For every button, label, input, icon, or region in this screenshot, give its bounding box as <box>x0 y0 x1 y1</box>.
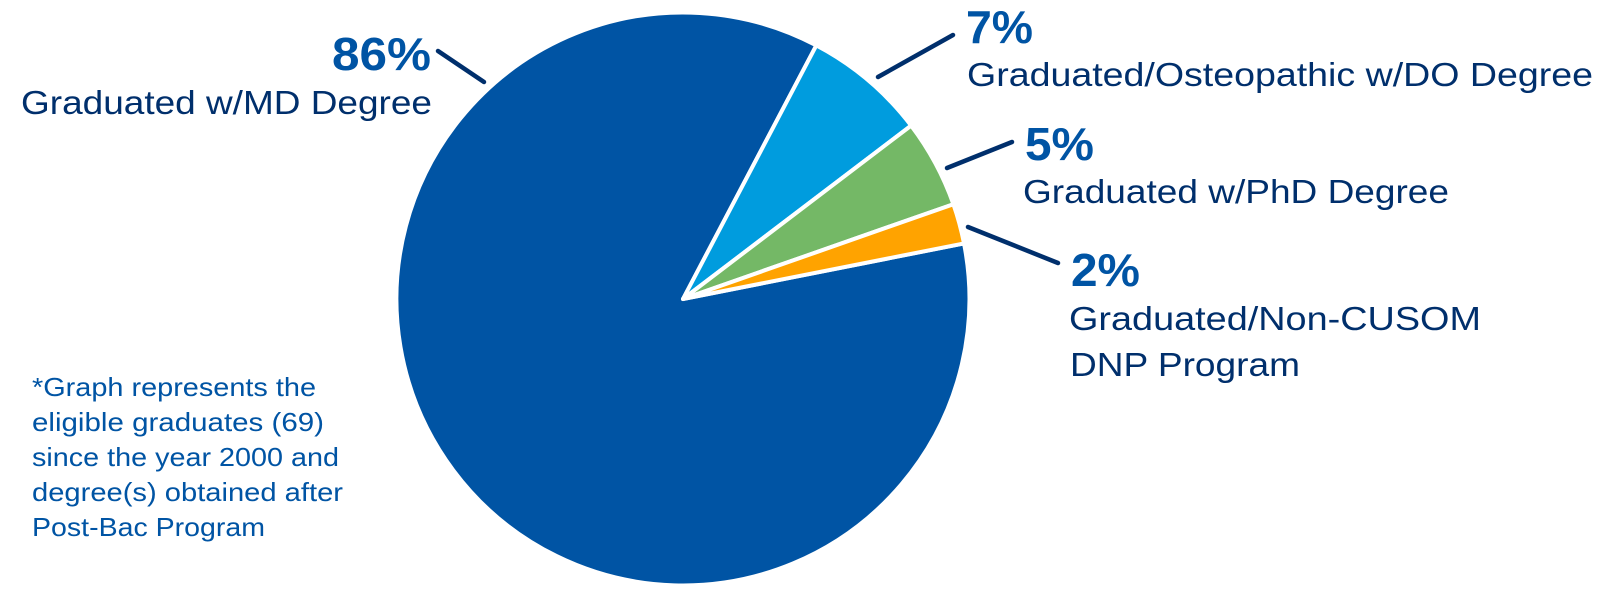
footnote <box>32 372 343 542</box>
slice: 5% PhD degree <box>683 126 953 299</box>
callout: 2% Non-CUSOM DNP program: 2% <box>1071 244 1140 296</box>
callout: 2% Non-CUSOM DNP program: Graduated/Non-CUSOM <box>1069 300 1481 337</box>
footnote: Post-Bac Program <box>32 512 265 542</box>
slice: 86% MD degree <box>396 12 969 585</box>
callout: 2% Non-CUSOM DNP program <box>968 227 1481 383</box>
pie chart <box>396 12 969 585</box>
footnote: eligible graduates (69) <box>32 407 324 437</box>
callout: 7% osteopathic DO degree: 7% <box>966 1 1033 53</box>
callout: 5% PhD degree <box>947 118 1449 210</box>
callout: 86% MD degree: Graduated w/MD Degree <box>21 84 432 121</box>
callout: 5% PhD degree: Graduated w/PhD Degree <box>1023 173 1449 210</box>
callout: 7% osteopathic DO degree: Graduated/Osteopathic w/DO Degree <box>967 56 1593 93</box>
footnote: *Graph represents the <box>32 372 316 402</box>
slice: 7% osteopathic DO degree <box>683 45 911 299</box>
callout: 2% Non-CUSOM DNP program: DNP Program <box>1070 346 1300 383</box>
footnote: degree(s) obtained after <box>32 477 343 507</box>
callout: 86% MD degree: 86% <box>332 28 431 80</box>
footnote: since the year 2000 and <box>32 442 339 472</box>
slice: 2% Non-CUSOM DNP program <box>683 204 964 299</box>
callout: 86% MD degree <box>21 28 484 121</box>
callout: 5% PhD degree: 5% <box>1025 118 1094 170</box>
callout: 7% osteopathic DO degree <box>878 1 1593 93</box>
